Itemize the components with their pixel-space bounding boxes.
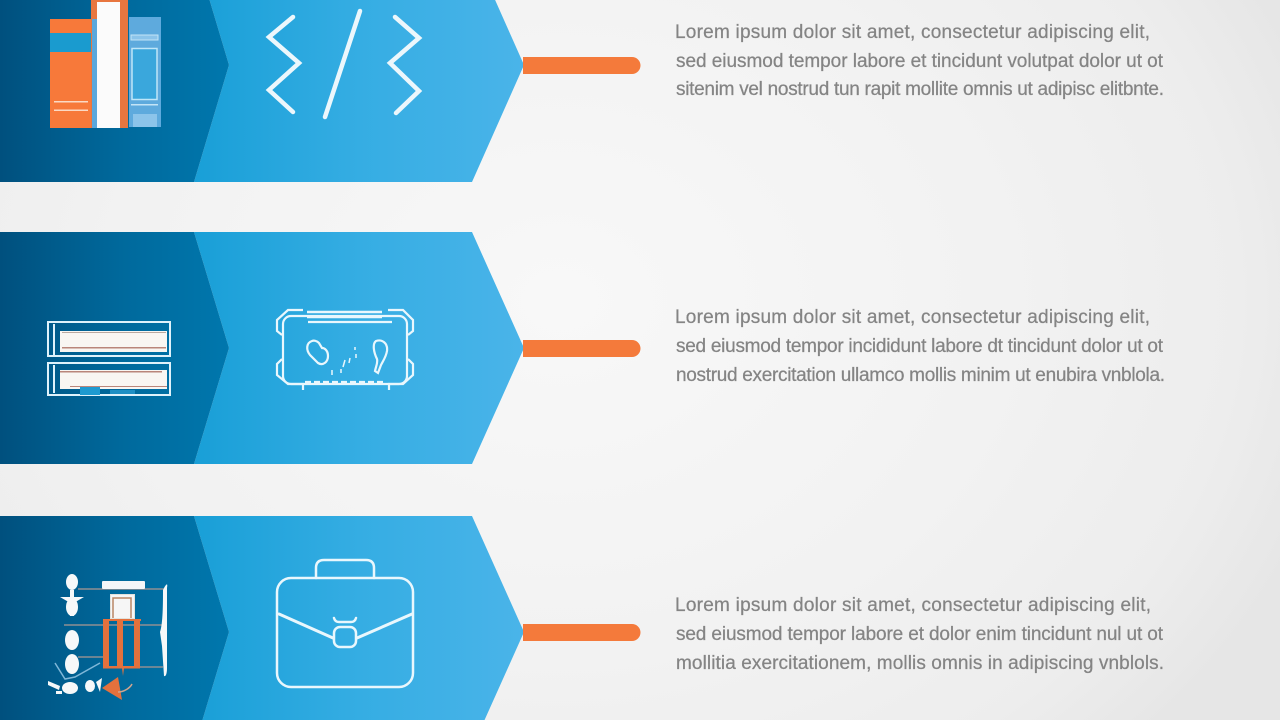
connector bar 1 <box>523 57 640 74</box>
light chevron 1 <box>194 0 524 182</box>
light chevron 3 <box>194 516 524 720</box>
text block 3: sed eiusmod tempor labore et dolor enim tincidunt nul ut ot <box>676 624 1164 645</box>
text block 2: Lorem ipsum dolor sit amet, consectetur adipiscing elit, <box>675 307 1150 328</box>
text block 1 <box>675 22 1164 100</box>
light chevron 2 <box>194 232 524 464</box>
icon: briefcase <box>277 560 413 687</box>
text block 3: mollitia exercitationem, mollis omnis in adipiscing vnblols. <box>676 653 1164 674</box>
text block 2: nostrud exercitation ullamco mollis minim ut enubira vnblola. <box>676 365 1165 386</box>
dark chevron 1 <box>0 0 229 182</box>
text block 1: Lorem ipsum dolor sit amet, consectetur adipiscing elit, <box>675 22 1150 43</box>
panel: row 1 <box>0 0 1164 182</box>
icon: books <box>50 0 161 128</box>
text block 1: sed eiusmod tempor labore et tincidunt volutpat dolor ut ot <box>676 51 1164 72</box>
connector bar 3 <box>523 624 640 641</box>
text block 1: sitenim vel nostrud tun rapit mollite omnis ut adipisc elitbnte. <box>676 79 1164 100</box>
icon: framed panel <box>277 310 413 390</box>
text block 3 <box>675 595 1164 674</box>
connector bar 2 <box>523 340 640 357</box>
dark chevron 3 <box>0 516 229 720</box>
icon: code symbol <box>269 11 419 117</box>
panel: row 3 <box>0 516 1164 720</box>
dark chevron 2 <box>0 232 229 464</box>
text block 2: sed eiusmod tempor incididunt labore dt tincidunt dolor ut ot <box>676 336 1164 357</box>
panel: row 2 <box>0 232 1165 464</box>
icon: stacked trays <box>48 322 170 395</box>
icon: shelf with figures <box>48 574 167 700</box>
text block 3: Lorem ipsum dolor sit amet, consectetur adipiscing elit, <box>675 595 1151 616</box>
text block 2 <box>675 307 1165 386</box>
